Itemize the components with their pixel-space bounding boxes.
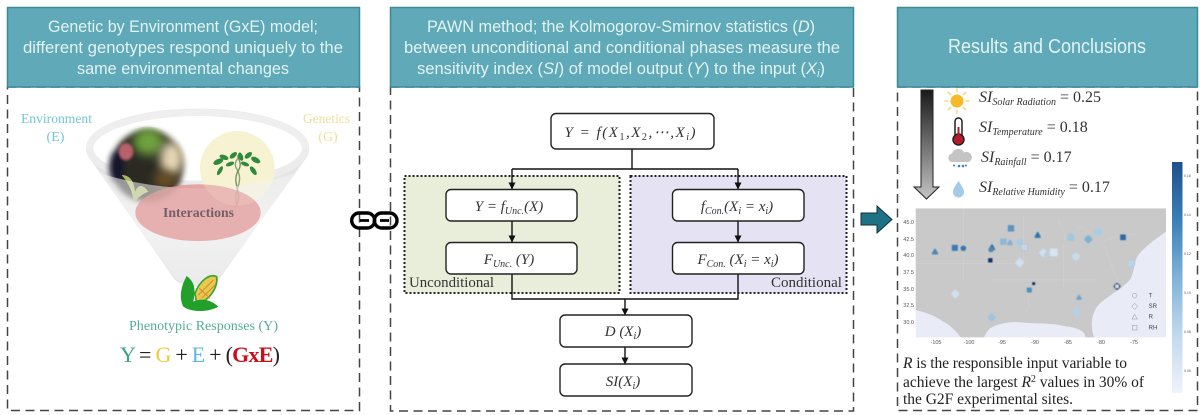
text: SI temperature: SI xyxy=(979,119,993,136)
box: model: i xyxy=(686,132,689,143)
icon: chain link xyxy=(352,213,397,228)
region: conditional xyxy=(630,176,846,293)
panel: GxE model xyxy=(8,8,360,410)
label: genetics: Genetics xyxy=(303,112,350,127)
heading: PAWN method: between unconditional and conditional phases measure the xyxy=(404,38,840,57)
box: conditional cdf: = x xyxy=(746,252,771,268)
map chart: -95 xyxy=(998,340,1006,346)
map legend: SR xyxy=(1149,304,1158,310)
colorbar: 0.08 xyxy=(1184,330,1191,334)
map axes: 37.5 xyxy=(903,270,914,276)
heading: results: Results and Conclusions xyxy=(948,36,1146,58)
box: conditional cdf: i xyxy=(744,259,747,270)
arrows: inner xyxy=(512,221,738,242)
box: unconditional cdf xyxy=(446,242,577,274)
box: conditional cdf: i xyxy=(771,259,774,270)
box: model: 1 xyxy=(619,132,624,143)
box: conditional model: ) xyxy=(767,199,773,215)
colorbar: 0.16 xyxy=(1184,174,1191,178)
icon: rain cloud xyxy=(948,149,972,167)
box: sensitivity index: i xyxy=(632,381,635,392)
label: environment xyxy=(21,112,92,145)
region: unconditional xyxy=(404,176,620,293)
map chart: -80 xyxy=(1097,340,1105,346)
box: conditional model xyxy=(672,190,804,221)
map axes: 40.0 xyxy=(903,253,914,259)
icon: water drop xyxy=(953,181,964,198)
text: SI solar radiation: Solar Radiation xyxy=(992,97,1056,108)
arrow: ranking gradient xyxy=(914,90,939,199)
colorbar: 0.06 xyxy=(1184,369,1191,373)
heading: results xyxy=(898,8,1198,87)
box: model xyxy=(551,114,714,149)
label: environment: Environment xyxy=(21,112,92,127)
conclusion text xyxy=(902,355,1145,408)
map legend: RH xyxy=(1149,326,1157,332)
box: unconditional model: Unc. xyxy=(505,206,524,217)
conclusion text: the G2F experimental sites. xyxy=(903,391,1073,408)
map markers xyxy=(932,226,1135,321)
text: SI rainfall: = 0.17 xyxy=(1027,149,1072,166)
equation: Y = G + E + (GxE) xyxy=(120,342,280,367)
translucent funnel front xyxy=(100,173,296,286)
pink interactions ellipse xyxy=(135,184,261,241)
genetics circle xyxy=(200,131,275,208)
box: model: ) xyxy=(690,125,696,141)
box: model: 2 xyxy=(642,132,647,143)
environment sphere xyxy=(109,128,183,202)
heading: PAWN method xyxy=(390,8,854,87)
heading: PAWN method: i xyxy=(817,68,820,80)
map chart xyxy=(903,208,1166,346)
box: model: Y = f(X xyxy=(564,125,618,141)
box: unconditional model: (X) xyxy=(524,199,543,215)
box: unconditional model xyxy=(446,190,577,221)
box: conditional cdf: F xyxy=(697,252,707,268)
label: phenotypic responses: Phenotypic Responses (Y) xyxy=(129,319,278,334)
box: unconditional cdf: Unc. xyxy=(493,259,512,270)
box: conditional cdf: ) xyxy=(773,252,779,268)
text: SI rainfall: Rainfall xyxy=(993,157,1027,168)
panel: results and conclusions xyxy=(898,8,1198,410)
heading: PAWN method: ) xyxy=(819,59,825,78)
label: environment: (E) xyxy=(47,130,65,145)
box: conditional cdf: Con. xyxy=(707,259,726,270)
box: unconditional cdf: (Y) xyxy=(512,252,534,268)
heading: GxE model: different genotypes respond uniquely to the xyxy=(23,38,343,57)
box: model: ,⋯,X xyxy=(648,125,686,141)
box: conditional cdf: (X xyxy=(726,252,745,268)
heading: PAWN method: sensitivity index (SI) of model output (Y) to the input (X xyxy=(417,59,817,78)
icon: sun xyxy=(944,88,970,114)
map axes: 45.0 xyxy=(903,220,914,226)
box: conditional model: i xyxy=(738,206,741,217)
colorbar: 0.14 xyxy=(1184,213,1191,217)
box: unconditional model: Y = f xyxy=(475,199,505,215)
box: D statistic: i xyxy=(633,331,636,342)
box: unconditional cdf: F xyxy=(484,252,493,268)
arrows: top split xyxy=(512,149,738,189)
map legend: R xyxy=(1149,315,1154,321)
heading: GxE model xyxy=(8,8,360,87)
conclusion text: achieve the largest R xyxy=(903,374,1031,391)
heading: PAWN method: PAWN method; the Kolmogorov-Smirnov statistics (D) xyxy=(427,17,815,36)
map axes: 42.5 xyxy=(903,237,914,243)
map chart: -75 xyxy=(1130,340,1138,346)
map legend xyxy=(1132,293,1158,332)
text: SI rainfall: SI xyxy=(981,149,995,166)
box: sensitivity index: SI(X xyxy=(606,374,632,390)
map axes: 35.0 xyxy=(903,287,914,293)
box: sensitivity index: ) xyxy=(634,374,640,390)
label: genetics xyxy=(303,112,350,145)
arrows: merge xyxy=(512,274,738,364)
map chart: -90 xyxy=(1031,340,1039,346)
map axes: 30.0 xyxy=(903,320,914,326)
colorbar xyxy=(1172,162,1191,393)
colorbar: 0.10 xyxy=(1184,291,1191,295)
box: conditional cdf xyxy=(672,242,804,274)
conclusion text: 2 xyxy=(1031,374,1036,385)
region: conditional: Conditional xyxy=(771,275,842,291)
box: D statistic: D (X xyxy=(605,324,633,340)
label: genetics: (G) xyxy=(318,130,338,145)
text: SI relative humidity: SI xyxy=(979,179,993,196)
icon: corn xyxy=(181,276,218,311)
map chart: -105 xyxy=(930,340,942,346)
map axes xyxy=(903,220,914,326)
box: sensitivity index xyxy=(560,364,692,396)
conclusion text: R is the responsible input variable to xyxy=(902,355,1127,372)
box: conditional model: f xyxy=(701,199,705,215)
box: D statistic xyxy=(560,315,692,347)
text: SI solar radiation: = 0.25 xyxy=(1056,89,1101,106)
panel: PAWN method xyxy=(390,8,854,411)
text: SI temperature: Temperature xyxy=(992,127,1043,138)
text: SI relative humidity: Relative Humidity xyxy=(991,187,1065,198)
heading: GxE model: Genetic by Environment (GxE) model; xyxy=(48,17,318,36)
text: SI relative humidity: = 0.17 xyxy=(1065,179,1110,196)
box: D statistic: ) xyxy=(635,324,641,340)
map chart: -100 xyxy=(963,340,975,346)
map axes: 32.5 xyxy=(903,303,914,309)
label: interactions: Interactions xyxy=(163,205,234,220)
text: SI temperature: = 0.18 xyxy=(1043,119,1088,136)
arrow: to results xyxy=(861,206,892,233)
rim xyxy=(90,112,306,148)
region: unconditional: Unconditional xyxy=(409,275,494,291)
heading: GxE model: same environmental changes xyxy=(77,59,289,78)
conclusion text: values in 30% of xyxy=(1036,374,1145,391)
box: model: ,X xyxy=(626,125,641,141)
box: conditional model: i xyxy=(765,206,768,217)
colorbar: 0.12 xyxy=(1184,252,1191,256)
funnel diagram xyxy=(87,112,308,311)
icon: thermometer xyxy=(953,118,964,145)
box: conditional model: Con. xyxy=(705,206,724,217)
box: conditional model: = x xyxy=(741,199,766,215)
text: SI solar radiation: SI xyxy=(979,89,993,106)
box: conditional model: (X xyxy=(724,199,739,215)
map chart: -85 xyxy=(1064,340,1072,346)
map legend: T xyxy=(1149,293,1153,299)
